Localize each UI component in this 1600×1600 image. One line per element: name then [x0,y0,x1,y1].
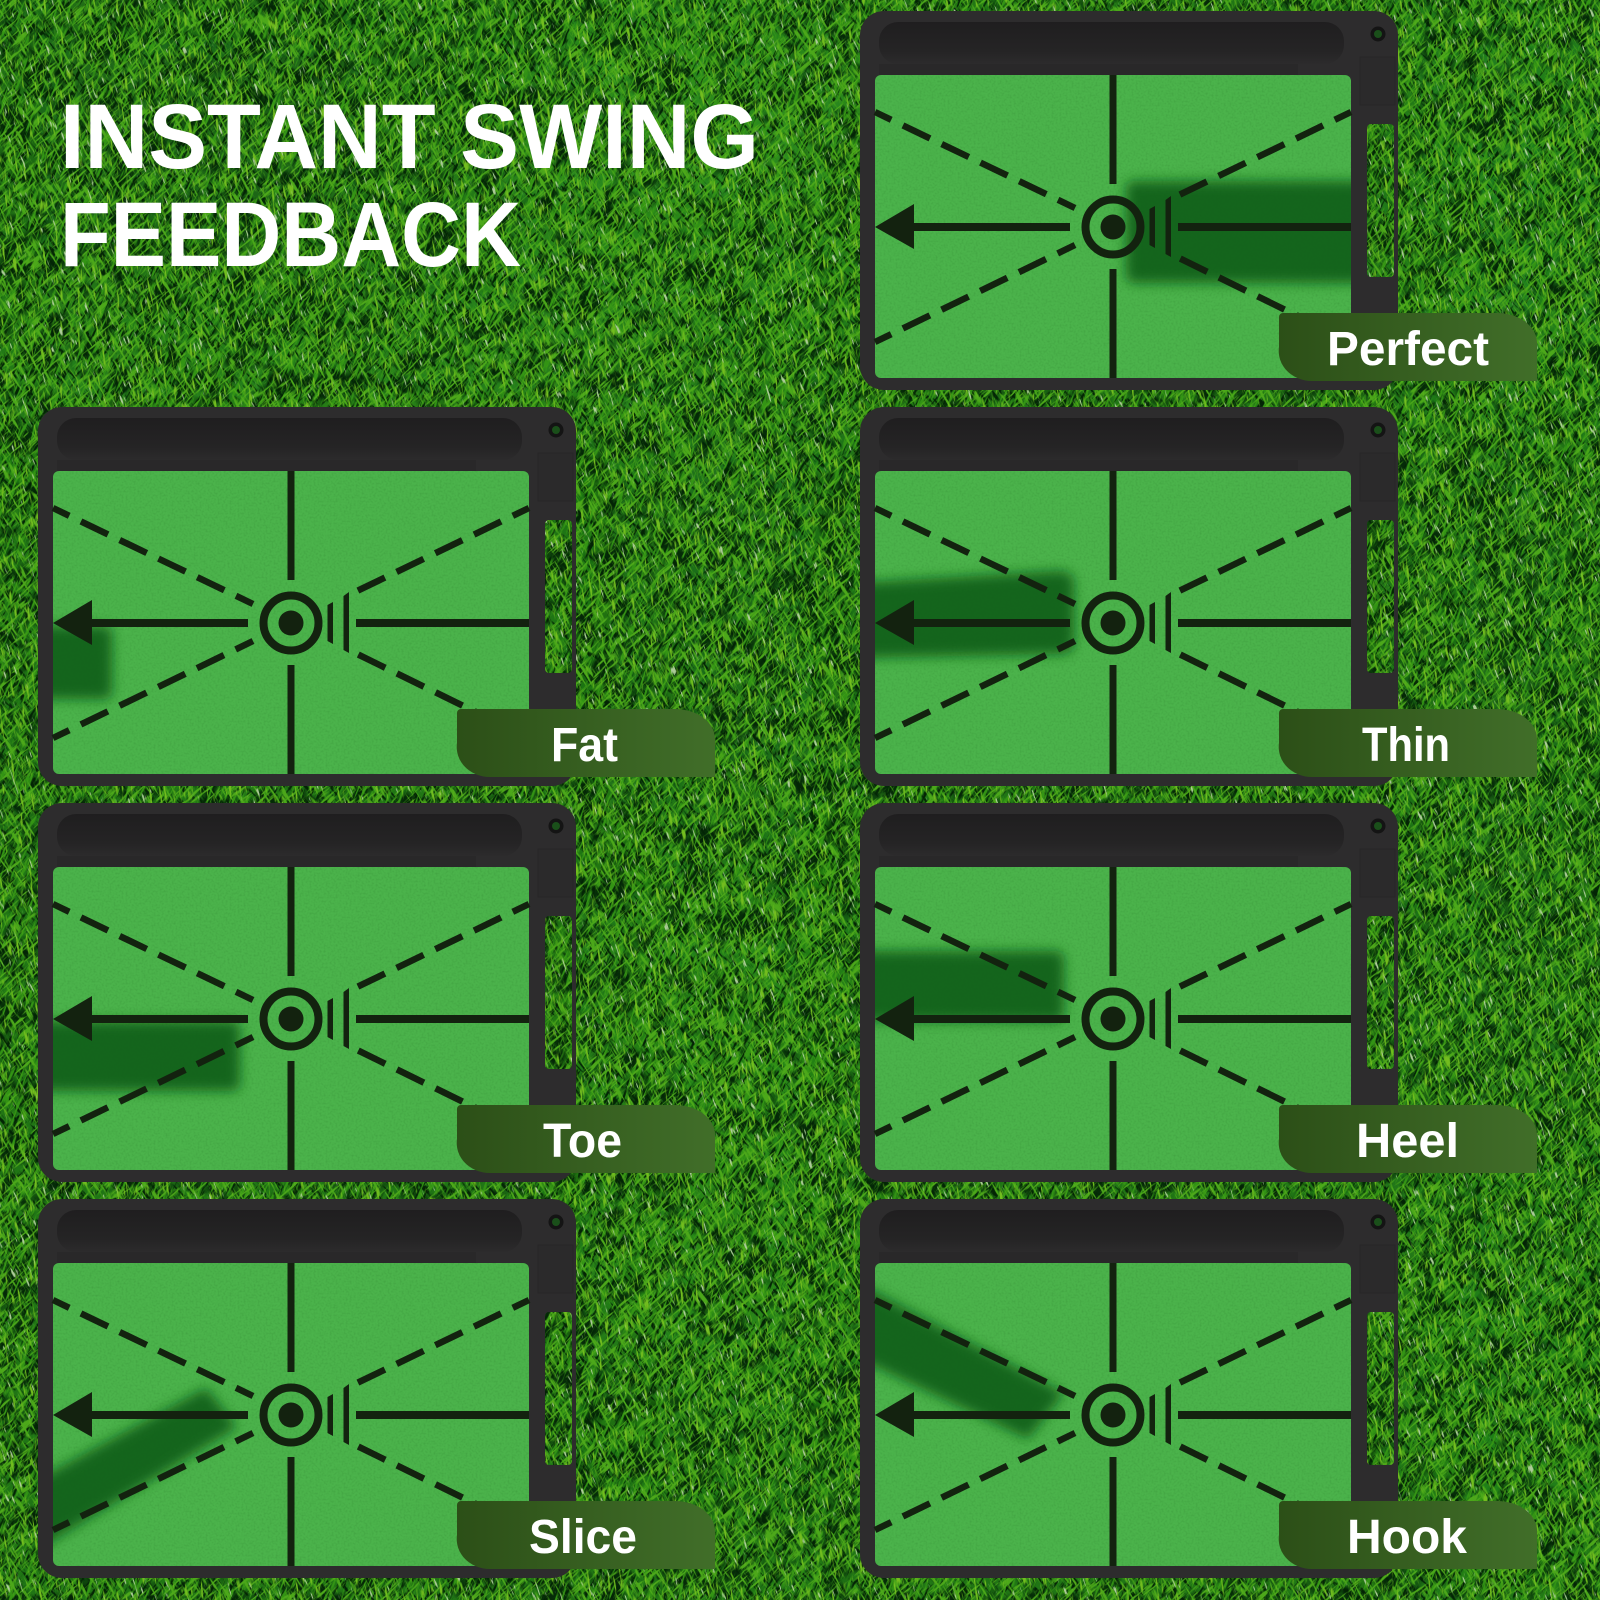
title [60,86,759,286]
panel: Heel [855,803,1537,1182]
panel: Toe [33,803,715,1182]
hitting surface [875,75,1351,378]
panel: Slice [33,1199,715,1578]
hitting surface [875,1263,1351,1566]
hitting surface [875,867,1351,1170]
guide lines [53,471,529,774]
guide lines [53,1263,529,1566]
hitting surface [53,1263,529,1566]
hitting surface [53,867,529,1170]
label: Slice: Slice [529,1511,637,1564]
label: Heel [1279,1105,1537,1173]
guide lines [875,471,1351,774]
mat frame [860,407,1398,786]
panel: Fat [33,407,715,786]
impact mark [33,626,112,699]
title: INSTANT SWING [60,86,759,188]
impact mark [855,951,1064,1021]
label: Fat: Fat [551,719,618,772]
label: Toe: Toe [543,1115,622,1168]
label: Perfect [1279,313,1537,381]
guide lines [875,867,1351,1170]
direction arrow [875,996,1070,1041]
label: Hook: Hook [1347,1511,1467,1564]
guide lines [875,75,1351,378]
mat frame [860,11,1398,390]
mat frame [860,1199,1398,1578]
label: Toe [457,1105,715,1173]
hitting surface [875,471,1351,774]
target icon [1086,1384,1171,1445]
impact mark [855,1281,1064,1439]
label: Hook [1279,1501,1537,1569]
label: Thin: Thin [1362,719,1450,772]
panel: Perfect [860,11,1537,390]
direction arrow [53,600,248,645]
mat frame [38,407,576,786]
hitting surface [53,471,529,774]
label: Fat [457,709,715,777]
label: Thin [1279,709,1537,777]
target icon [1086,196,1171,257]
label: Slice [457,1501,715,1569]
guide lines [875,1263,1351,1566]
label: Heel: Heel [1356,1115,1459,1168]
panel: Hook [855,1199,1537,1578]
mat frame [860,803,1398,1182]
target icon [264,1384,349,1445]
direction arrow [875,1392,1070,1437]
direction arrow [53,996,248,1041]
title: FEEDBACK [60,184,521,286]
direction arrow [53,1392,248,1437]
target icon [264,988,349,1049]
impact mark [33,1388,237,1553]
direction arrow [875,600,1070,645]
guide lines [53,867,529,1170]
impact mark [1126,181,1366,283]
direction arrow [875,204,1070,249]
target icon [1086,988,1171,1049]
target icon [264,592,349,653]
mat frame [38,1199,576,1578]
mat frame [38,803,576,1182]
label: Perfect: Perfect [1327,323,1489,376]
target icon [1086,592,1171,653]
panel: Thin [855,407,1537,786]
impact mark [855,571,1074,658]
impact mark [33,1021,240,1091]
